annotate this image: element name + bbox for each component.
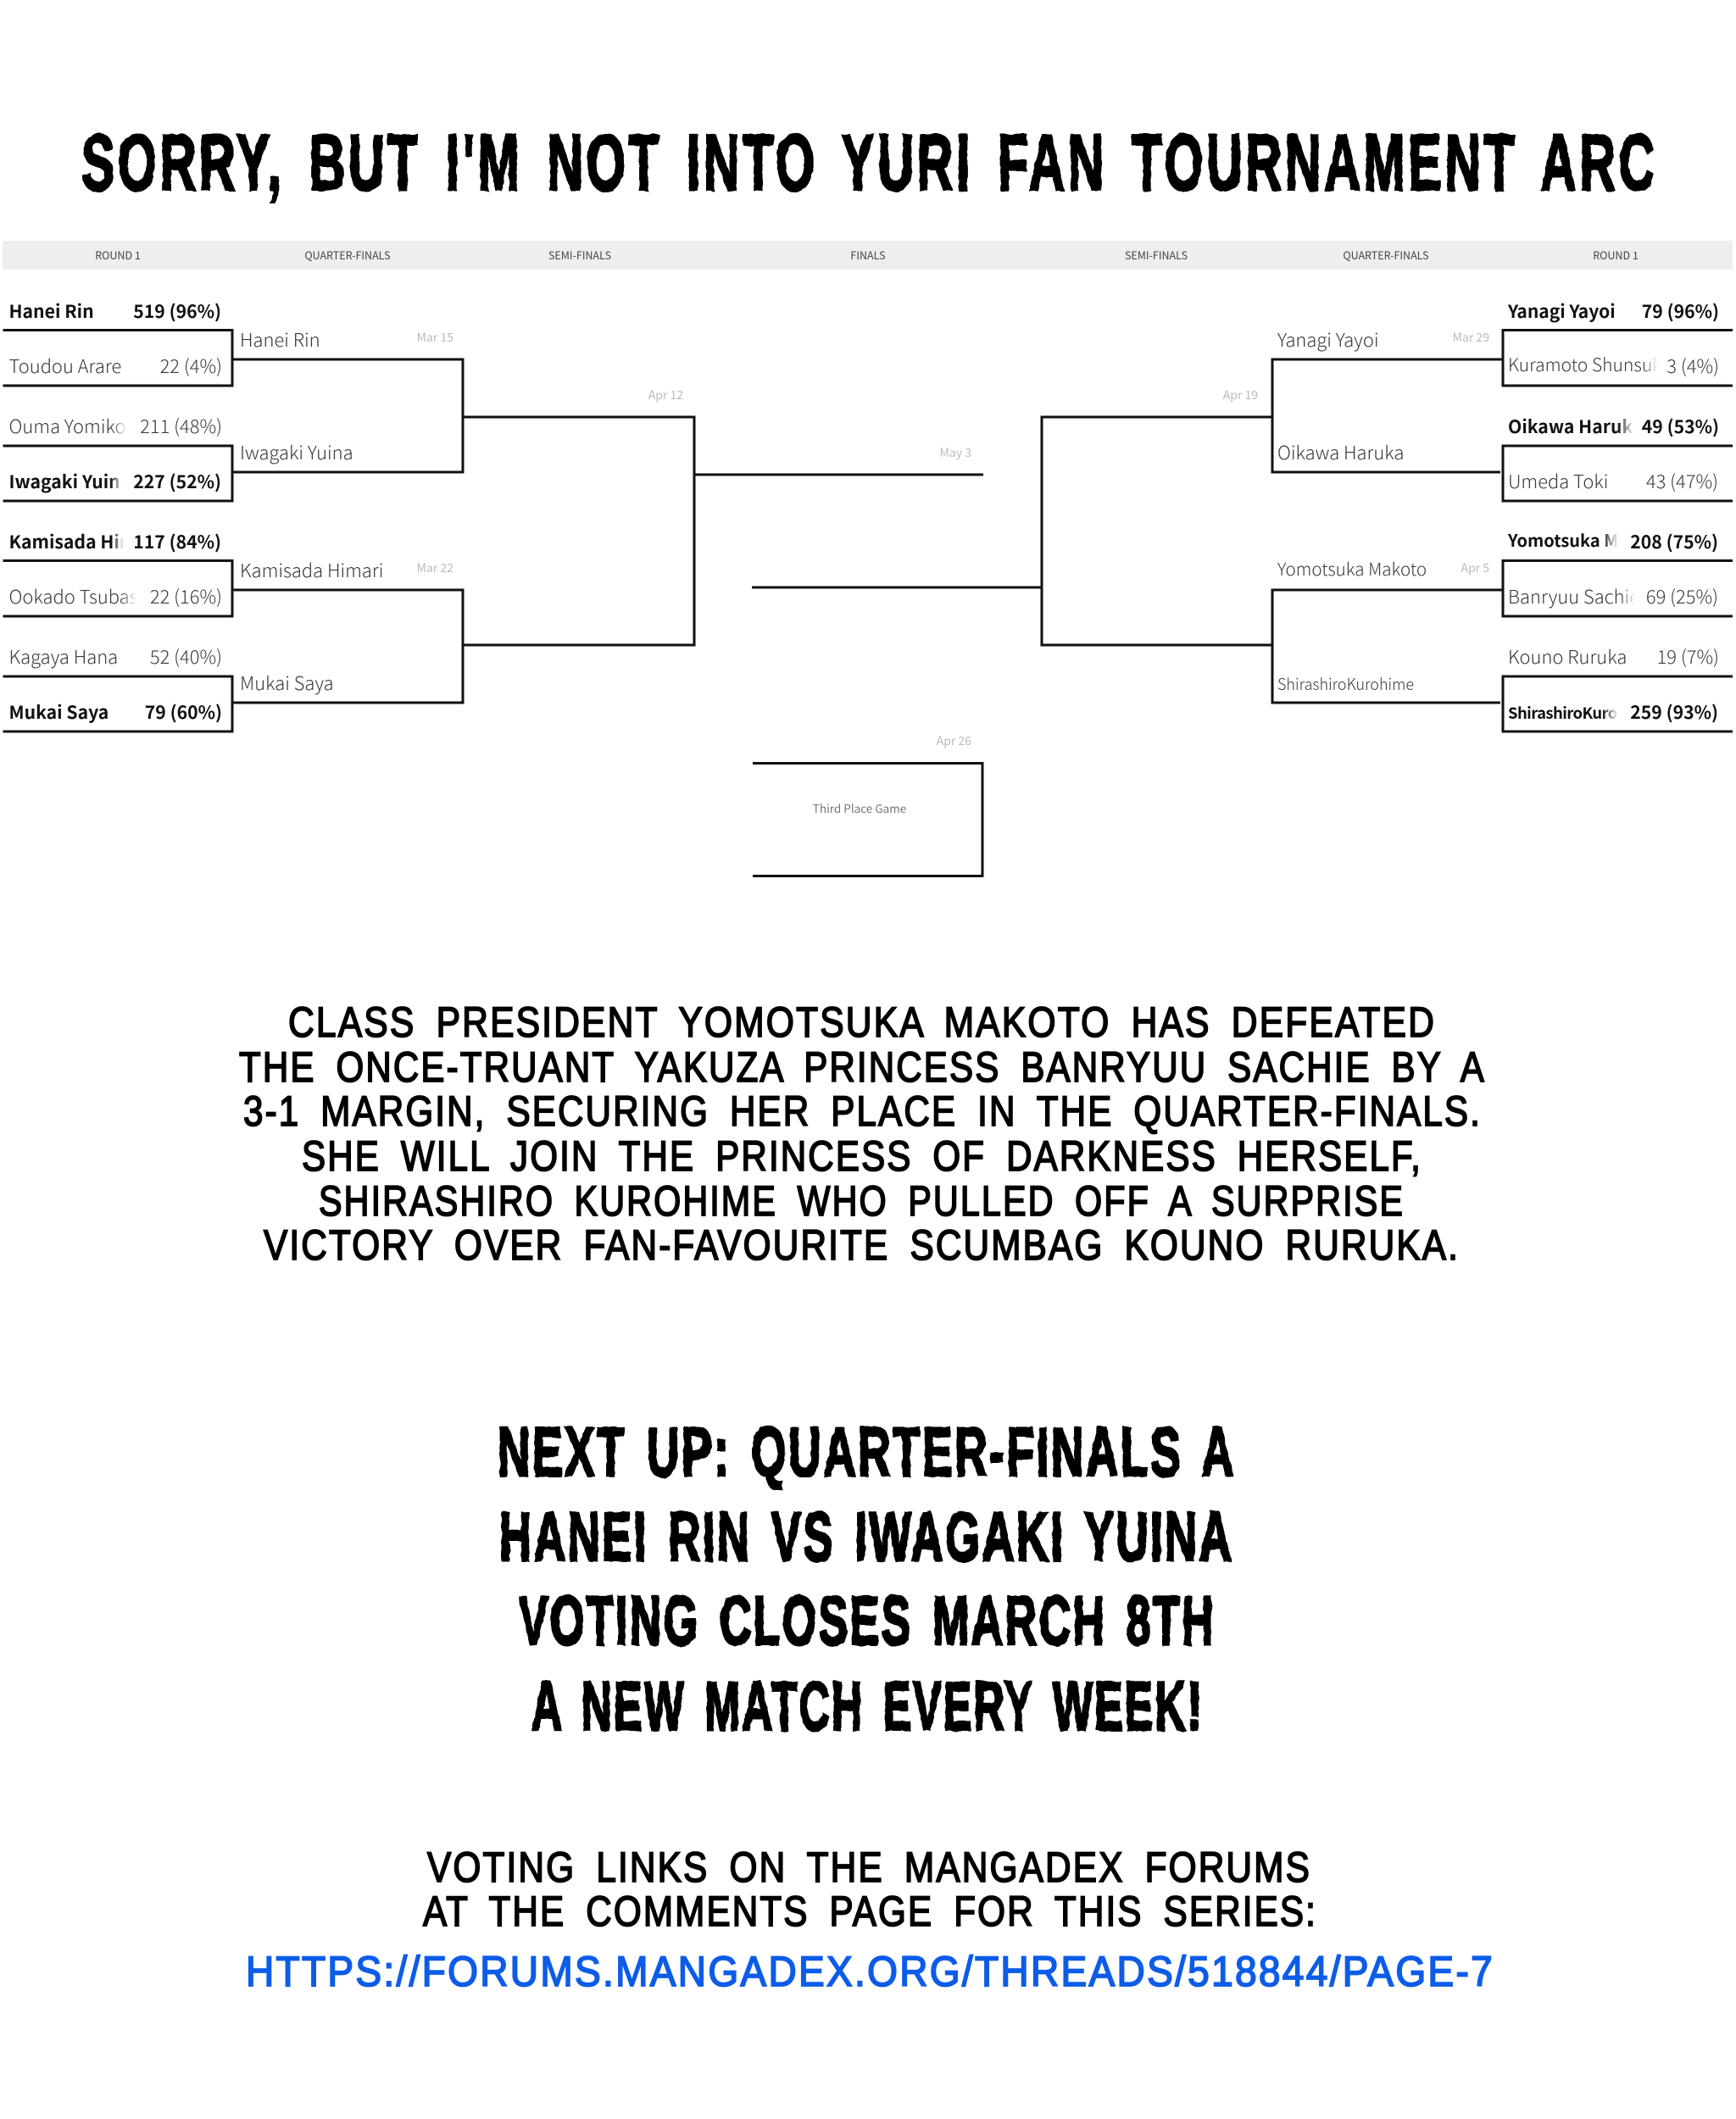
right round 1 results: 49 (53%)	[1642, 413, 1719, 439]
left quarter-finals names: Hanei Rin	[240, 326, 320, 353]
left round 1 results: Kamisada Himari	[8, 528, 161, 554]
right round 1 results: 79 (96%)	[1642, 298, 1719, 324]
left round 1 results: Kagaya Hana	[8, 643, 118, 670]
match dates: Mar 22	[417, 559, 453, 576]
left round 1 results: 227 (52%)	[133, 468, 221, 494]
third place game label: Third Place Game	[813, 799, 906, 816]
right quarter-finals names: Yomotsuka Makoto	[1277, 555, 1427, 581]
match recap paragraph: 3-1 MARGIN, SECURING HER PLACE IN THE QUARTER-FINALS.	[243, 1087, 1482, 1135]
match dates: Apr 26	[937, 732, 971, 749]
right quarter-finals names: Oikawa Haruka	[1277, 439, 1404, 465]
match recap paragraph: SHE WILL JOIN THE PRINCESS OF DARKNESS HERSELF,	[302, 1132, 1422, 1180]
match recap paragraph: THE ONCE-TRUANT YAKUZA PRINCESS BANRYUU SACHIE BY A	[239, 1043, 1486, 1091]
left quarter-finals names: Kamisada Himari	[240, 557, 383, 583]
next up announcement: HANEI RIN VS IWAGAKI YUINA	[499, 1499, 1233, 1576]
right round 1 results: Kouno Ruruka	[1508, 643, 1627, 670]
voting instructions	[423, 1844, 1317, 1935]
bracket round header bar: SEMI-FINALS	[548, 247, 611, 263]
match recap paragraph	[239, 998, 1486, 1269]
third place game bracket	[753, 763, 982, 876]
left round 1 results: Ookado Tsubasa	[8, 583, 147, 609]
right round 1 results: 259 (93%)	[1630, 698, 1718, 725]
match dates: May 3	[940, 444, 971, 461]
match dates: Mar 15	[417, 329, 453, 346]
left round 1 results: 22 (16%)	[150, 583, 222, 609]
match recap paragraph: CLASS PRESIDENT YOMOTSUKA MAKOTO HAS DEFEATED	[288, 998, 1436, 1046]
left round 1 results: Ouma Yomiko	[8, 413, 126, 439]
bracket round header bar: QUARTER-FINALS	[304, 247, 391, 263]
right round 1 results: Kuramoto Shunsuke	[1508, 352, 1671, 377]
left quarter-finals names: Mukai Saya	[240, 670, 334, 696]
next up announcement: NEXT UP: QUARTER-FINALS A	[498, 1414, 1236, 1491]
left round 1 results: Hanei Rin	[8, 298, 94, 324]
left round 1 results: 79 (60%)	[145, 698, 222, 725]
match dates	[417, 329, 1489, 749]
match recap paragraph: VICTORY OVER FAN-FAVOURITE SCUMBAG KOUNO RURUKA.	[264, 1221, 1460, 1269]
match recap paragraph: SHIRASHIRO KUROHIME WHO PULLED OFF A SURPRISE	[319, 1177, 1405, 1225]
left quarter-finals names	[240, 326, 383, 696]
left round 1 results: 117 (84%)	[133, 528, 221, 554]
left round 1 results: 22 (4%)	[160, 353, 222, 379]
voting instructions: AT THE COMMENTS PAGE FOR THIS SERIES:	[423, 1888, 1317, 1935]
next up announcement	[498, 1414, 1236, 1745]
bracket round header bar: ROUND 1	[1593, 247, 1639, 263]
bracket round header bar	[3, 241, 1733, 270]
right round 1 results: ShirashiroKurohime	[1508, 702, 1654, 724]
voting instructions: VOTING LINKS ON THE MANGADEX FORUMS	[427, 1844, 1311, 1891]
left round 1 results	[8, 298, 222, 725]
right quarter-finals names	[1277, 326, 1427, 695]
right round 1 results: Banryuu Sachie	[1508, 583, 1639, 609]
bracket connector lines	[3, 331, 1733, 731]
left round 1 results: Iwagaki Yuina	[8, 468, 131, 494]
left round 1 results: 519 (96%)	[133, 298, 221, 324]
left quarter-finals names: Iwagaki Yuina	[240, 439, 353, 465]
bracket round header bar: ROUND 1	[95, 247, 141, 263]
left round 1 results: 52 (40%)	[150, 643, 222, 670]
match dates: Mar 29	[1453, 329, 1489, 346]
match dates: Apr 19	[1223, 387, 1258, 403]
right round 1 results: 69 (25%)	[1646, 583, 1718, 609]
right round 1 results: 208 (75%)	[1630, 528, 1718, 554]
match dates: Apr 5	[1461, 559, 1489, 576]
match dates: Apr 12	[648, 387, 683, 403]
right round 1 results: Umeda Toki	[1508, 468, 1608, 494]
bracket round header bar: QUARTER-FINALS	[1343, 247, 1429, 263]
right quarter-finals names: Yanagi Yayoi	[1277, 326, 1379, 353]
right round 1 results: Yomotsuka Makoto	[1507, 527, 1666, 552]
bracket round header bar: SEMI-FINALS	[1125, 247, 1188, 263]
right round 1 results: 19 (7%)	[1657, 643, 1719, 670]
right round 1 results: 3 (4%)	[1666, 353, 1719, 379]
next up announcement: VOTING CLOSES MARCH 8TH	[519, 1582, 1216, 1660]
next up announcement: A NEW MATCH EVERY WEEK!	[531, 1668, 1204, 1745]
right round 1 results: Oikawa Haruka	[1508, 413, 1644, 439]
left round 1 results: Toudou Arare	[8, 353, 121, 379]
right round 1 results	[1507, 298, 1719, 725]
right round 1 results: Yanagi Yayoi	[1507, 298, 1616, 324]
bracket round header bar: FINALS	[850, 247, 886, 263]
left round 1 results: Mukai Saya	[8, 698, 108, 725]
left round 1 results: 211 (48%)	[140, 413, 222, 439]
forum link: HTTPS://FORUMS.MANGADEX.ORG/THREADS/518844/PAGE-7	[246, 1948, 1494, 1995]
right round 1 results: 43 (47%)	[1646, 468, 1718, 494]
right quarter-finals names: ShirashiroKurohime	[1277, 672, 1414, 695]
